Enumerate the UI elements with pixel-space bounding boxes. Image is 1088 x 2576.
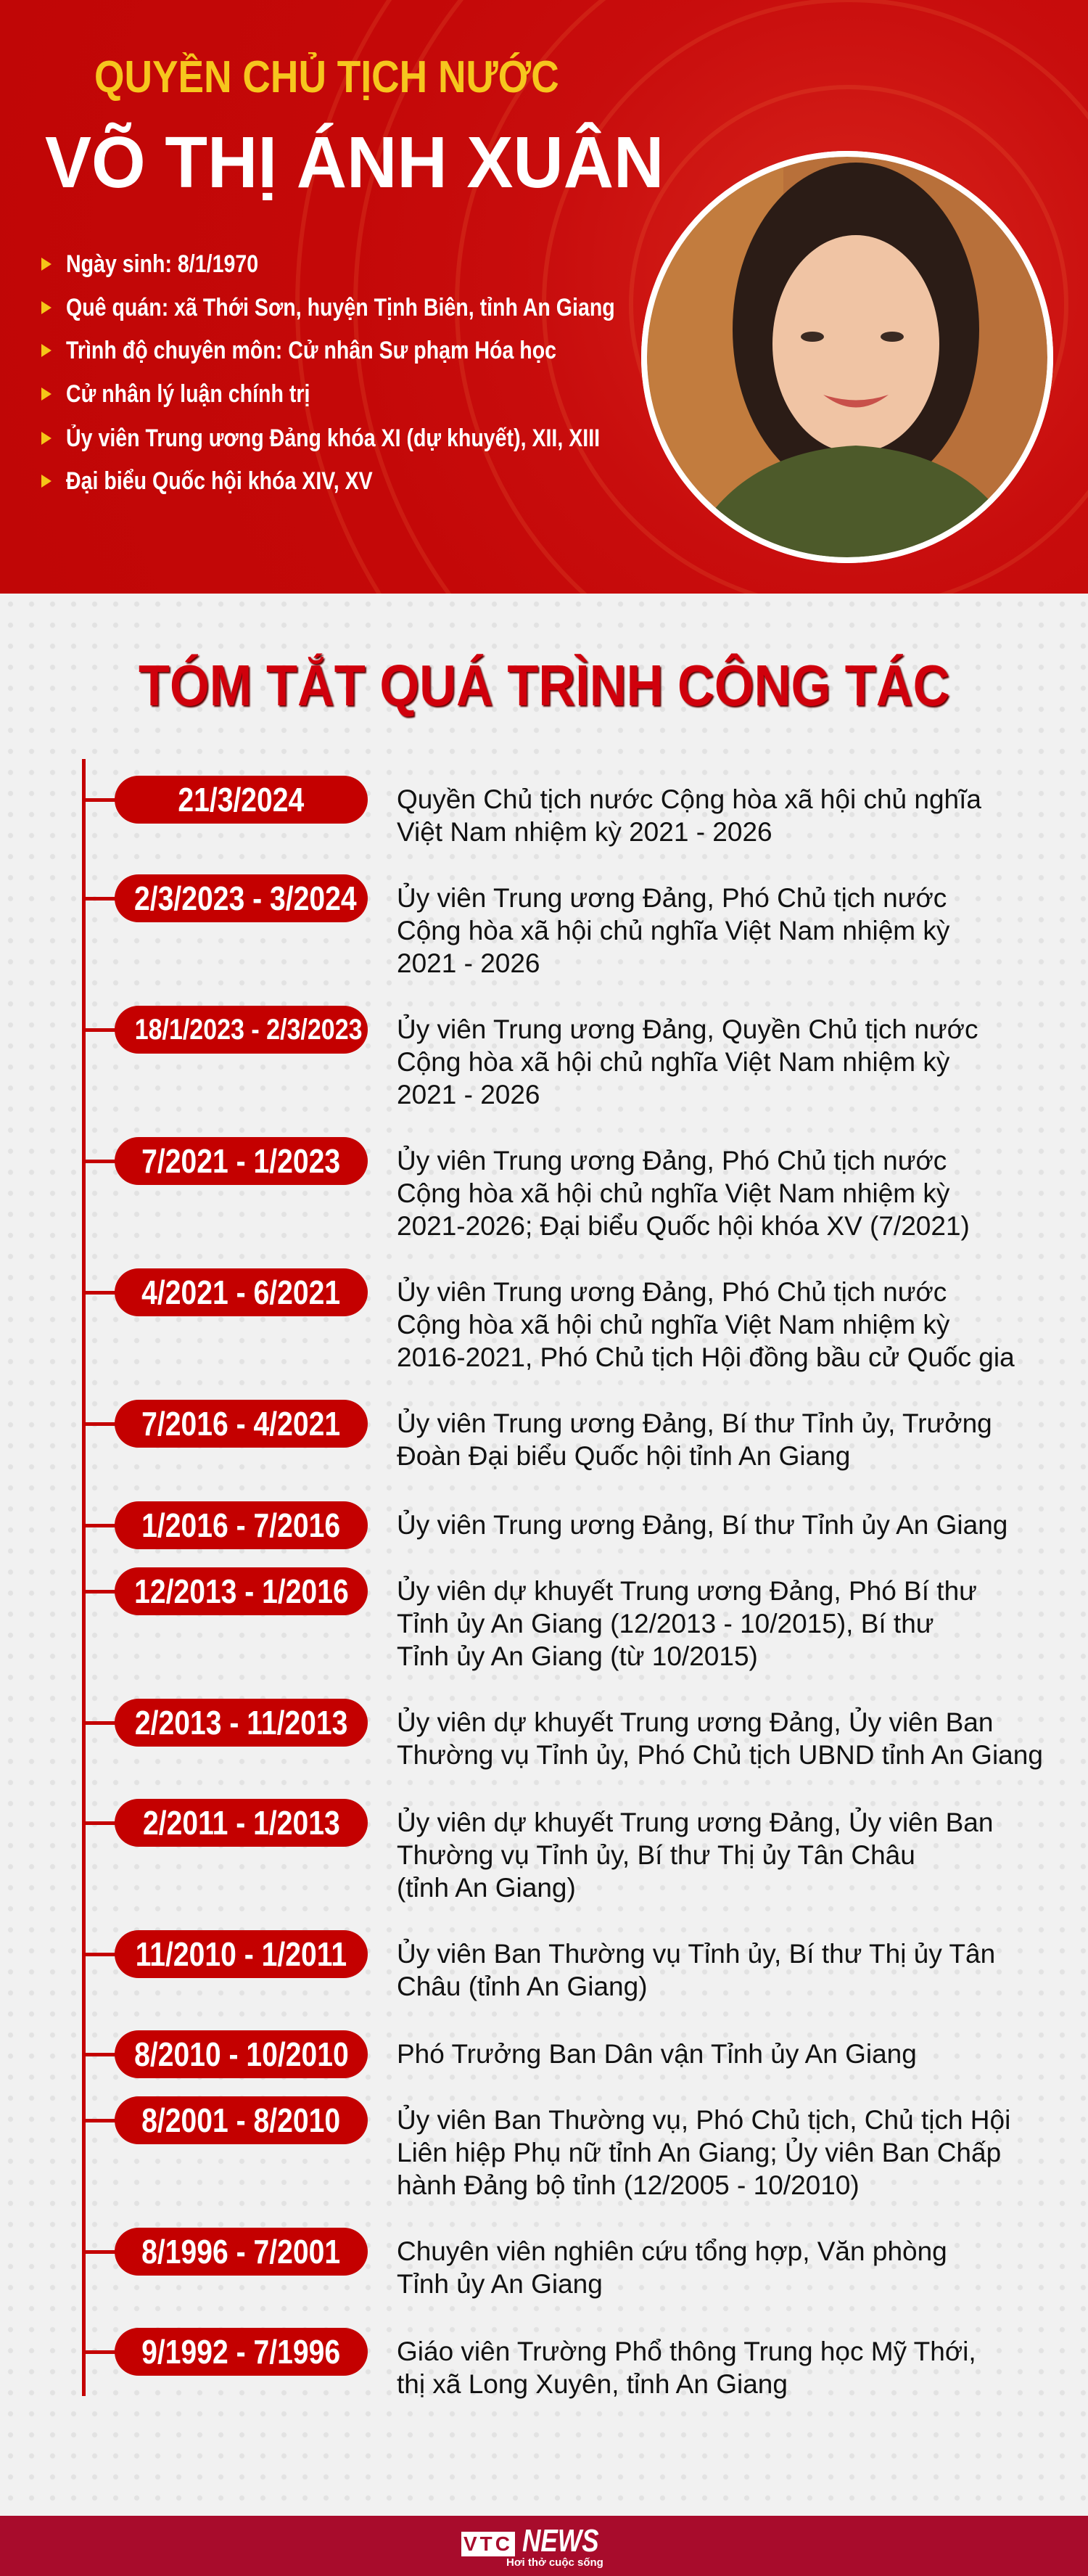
entry 10: [86, 1799, 993, 1903]
timeline entries: 8/2001 - 8/2010: [142, 2101, 340, 2139]
subtitle: QUYỀN CHỦ TỊCH NƯỚC: [94, 52, 559, 102]
entry 12: [86, 2030, 917, 2078]
timeline entries: 18/1/2023 - 2/3/2023: [135, 1014, 363, 1046]
logo: VTC News: Hơi thở cuộc sống: [506, 2556, 603, 2569]
timeline entries: Ủy viên dự khuyết Trung ương Đảng, Ủy viên Ban: [397, 1808, 993, 1837]
entry 4: [86, 1137, 970, 1241]
bullet: hometown: [41, 294, 615, 321]
logo: VTC News: VTC: [463, 2532, 513, 2555]
entry 7: [86, 1501, 1007, 1549]
timeline entries: Ủy viên Ban Thường vụ Tỉnh ủy, Bí thư Thị ủy Tân: [397, 1939, 995, 1969]
timeline entries: Ủy viên Ban Thường vụ, Phó Chủ tịch, Chủ tịch Hội: [397, 2105, 1010, 2135]
bullet: assembly: [41, 467, 373, 495]
entry 5: [86, 1268, 1015, 1372]
timeline entries: 8/1996 - 7/2001: [142, 2233, 340, 2271]
timeline entries: Ủy viên Trung ương Đảng, Bí thư Tỉnh ủy, Trưởng: [397, 1408, 992, 1438]
timeline entries: 12/2013 - 1/2016: [134, 1572, 348, 1610]
timeline entries: 11/2010 - 1/2011: [136, 1935, 347, 1973]
bullet list: Ủy viên Trung ương Đảng khóa XI (dự khuyết), XII, XIII: [66, 424, 600, 452]
timeline entries: 8/2010 - 10/2010: [134, 2035, 348, 2073]
timeline entries: Đoàn Đại biểu Quốc hội tỉnh An Giang: [397, 1441, 850, 1471]
title name: VÕ THỊ ÁNH XUÂN: [45, 122, 664, 203]
timeline entries: Liên hiệp Phụ nữ tỉnh An Giang; Ủy viên Ban Chấp: [397, 2138, 1001, 2167]
bullet: party: [41, 424, 600, 452]
timeline entries: Ủy viên dự khuyết Trung ương Đảng, Phó Bí thư: [397, 1576, 977, 1606]
timeline entries: Ủy viên Trung ương Đảng, Phó Chủ tịch nước: [397, 883, 947, 913]
timeline entries: Tỉnh ủy An Giang (từ 10/2015): [397, 1641, 758, 1671]
timeline entries: 2/2011 - 1/2013: [143, 1804, 339, 1842]
timeline entries: Ủy viên Trung ương Đảng, Phó Chủ tịch nước: [397, 1277, 947, 1307]
entry 15: [86, 2328, 976, 2399]
timeline entries: Tỉnh ủy An Giang (12/2013 - 10/2015), Bí thư: [397, 1609, 934, 1638]
bullet list: Trình độ chuyên môn: Cử nhân Sư phạm Hóa học: [66, 337, 556, 364]
timeline entries: Thường vụ Tỉnh ủy, Bí thư Thị ủy Tân Châu: [397, 1840, 915, 1870]
timeline entries: [86, 776, 1043, 2399]
timeline entries: Chuyên viên nghiên cứu tổng hợp, Văn phòng: [397, 2236, 947, 2266]
section heading: TÓM TẮT QUÁ TRÌNH CÔNG TÁC: [139, 653, 949, 718]
timeline entries: Ủy viên dự khuyết Trung ương Đảng, Ủy viên Ban: [397, 1707, 993, 1737]
entry 2: [86, 874, 950, 978]
timeline entries: 9/1992 - 7/1996: [142, 2333, 340, 2371]
timeline entries: 21/3/2024: [178, 781, 304, 819]
bullet: education: [41, 337, 556, 364]
timeline entries: 2021 - 2026: [397, 1080, 540, 1109]
timeline entries: Phó Trưởng Ban Dân vận Tỉnh ủy An Giang: [397, 2039, 917, 2069]
timeline vertical line: [82, 759, 86, 2396]
timeline entries: (tỉnh An Giang): [397, 1873, 576, 1903]
entry 6: [86, 1400, 992, 1471]
entry 13: [86, 2096, 1010, 2200]
timeline entries: thị xã Long Xuyên, tỉnh An Giang: [397, 2369, 788, 2399]
timeline entries: 2/2013 - 11/2013: [135, 1704, 347, 1742]
entry 3: [86, 1006, 978, 1109]
timeline entries: Quyền Chủ tịch nước Cộng hòa xã hội chủ nghĩa: [397, 784, 981, 814]
timeline entries: Cộng hòa xã hội chủ nghĩa Việt Nam nhiệm kỳ: [397, 1310, 949, 1340]
entry 1: [86, 776, 981, 847]
entry 14: [86, 2228, 947, 2299]
timeline entries: 2/3/2023 - 3/2024: [134, 879, 357, 917]
logo: VTC News: [461, 2523, 603, 2569]
background timeline panel: [0, 594, 1088, 2516]
bullet list: [41, 250, 615, 495]
footer: [0, 2516, 1088, 2576]
timeline entries: 1/2016 - 7/2016: [142, 1506, 340, 1544]
portrait photo: [641, 151, 1053, 563]
bullet list: Cử nhân lý luận chính trị: [66, 380, 310, 408]
bullet list: Quê quán: xã Thới Sơn, huyện Tịnh Biên, tỉnh An Giang: [66, 294, 615, 321]
timeline entries: Cộng hòa xã hội chủ nghĩa Việt Nam nhiệm kỳ: [397, 1047, 949, 1077]
header panel: [0, 0, 1088, 594]
timeline entries: Tỉnh ủy An Giang: [397, 2269, 603, 2299]
timeline entries: 2021-2026; Đại biểu Quốc hội khóa XV (7/2021): [397, 1211, 970, 1241]
timeline entries: Thường vụ Tỉnh ủy, Phó Chủ tịch UBND tỉnh An Giang: [397, 1740, 1043, 1770]
timeline entries: Ủy viên Trung ương Đảng, Quyền Chủ tịch nước: [397, 1014, 978, 1044]
timeline entries: Châu (tỉnh An Giang): [397, 1972, 648, 2001]
timeline entries: 2016-2021, Phó Chủ tịch Hội đồng bầu cử Quốc gia: [397, 1342, 1015, 1372]
timeline entries: Ủy viên Trung ương Đảng, Phó Chủ tịch nước: [397, 1146, 947, 1176]
bullet list: Ngày sinh: 8/1/1970: [66, 250, 258, 278]
bullet list: Đại biểu Quốc hội khóa XIV, XV: [66, 467, 373, 495]
bullet: politics: [41, 380, 310, 408]
timeline entries: hành Đảng bộ tỉnh (12/2005 - 10/2010): [397, 2170, 860, 2200]
timeline entries: Ủy viên Trung ương Đảng, Bí thư Tỉnh ủy An Giang: [397, 1510, 1007, 1540]
timeline entries: 7/2021 - 1/2023: [142, 1142, 340, 1180]
timeline entries: 2021 - 2026: [397, 948, 540, 978]
timeline entries: Giáo viên Trường Phổ thông Trung học Mỹ Thới,: [397, 2337, 976, 2366]
timeline entries: 7/2016 - 4/2021: [142, 1405, 340, 1443]
timeline entries: Việt Nam nhiệm kỳ 2021 - 2026: [397, 817, 772, 847]
bullet: birth: [41, 250, 258, 278]
entry 8: [86, 1567, 977, 1671]
timeline entries: 4/2021 - 6/2021: [142, 1273, 340, 1311]
timeline entries: Cộng hòa xã hội chủ nghĩa Việt Nam nhiệm kỳ: [397, 1178, 949, 1208]
entry 9: [86, 1699, 1043, 1770]
timeline entries: Cộng hòa xã hội chủ nghĩa Việt Nam nhiệm kỳ: [397, 916, 949, 946]
logo: VTC News: NEWS: [522, 2523, 599, 2559]
entry 11: [86, 1930, 995, 2001]
